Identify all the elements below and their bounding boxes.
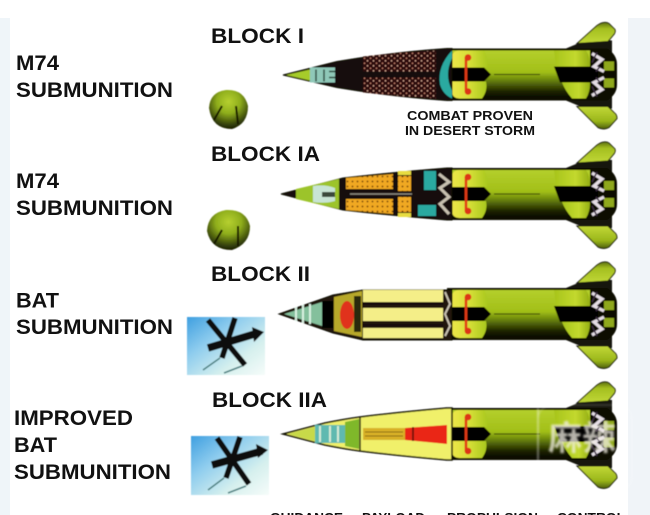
watermark: 麻辣	[548, 420, 616, 458]
rear section	[447, 262, 617, 368]
nose tip	[286, 70, 310, 80]
rear section	[447, 142, 617, 248]
label: improved BAT submunition (Block IIA): IMPROVED	[14, 407, 133, 430]
callout: combat proven: COMBAT PROVEN	[407, 109, 533, 123]
label: M74 submunition (Block IA): SUBMUNITION	[16, 197, 173, 220]
wiring	[439, 174, 449, 214]
heading: Block II: BLOCK II	[211, 263, 310, 286]
yellow bay bottom	[363, 328, 443, 338]
watermark	[538, 405, 632, 491]
teal crescent	[440, 50, 452, 98]
missile: Block IIA	[283, 382, 617, 488]
missile: Block II	[279, 262, 617, 368]
payload dots	[363, 50, 436, 72]
icon: BAT submunition image 1	[187, 317, 265, 375]
heading: Block IA: BLOCK IA	[211, 143, 320, 166]
missile: Block I	[283, 22, 617, 129]
forebody	[283, 48, 452, 100]
label: improved BAT submunition (Block IIA): SUBMUNITION	[14, 461, 171, 484]
rear section	[447, 22, 617, 129]
label: improved BAT submunition (Block IIA)	[14, 407, 171, 484]
label: M74 submunition (Block IA)	[16, 170, 173, 220]
yellow bay middle	[363, 308, 443, 321]
callout: combat proven: IN DESERT STORM	[405, 124, 535, 138]
yellow bay	[398, 176, 411, 191]
forebody	[281, 168, 452, 220]
label: M74 submunition (Block I): SUBMUNITION	[16, 79, 173, 102]
wiring	[445, 292, 450, 336]
guidance	[310, 68, 335, 82]
missile: Block IA	[281, 142, 617, 248]
label: BAT submunition (Block II)	[16, 290, 173, 339]
icon: M74 bomblet 1	[209, 90, 248, 129]
red oval	[340, 301, 354, 329]
payload orange	[346, 174, 393, 189]
heading: Block I: BLOCK I	[211, 25, 304, 48]
guidance	[315, 425, 345, 443]
nose	[296, 179, 339, 209]
label: improved BAT submunition (Block IIA): BAT	[14, 434, 57, 457]
yellow bay top	[363, 290, 443, 302]
forebody	[283, 408, 452, 460]
teal electronics	[418, 171, 436, 216]
bottom section labels	[270, 510, 625, 515]
core	[363, 428, 405, 440]
nose	[288, 427, 315, 441]
label: M74 submunition (Block I)	[16, 52, 173, 102]
label: M74 submunition (Block IA): M74	[16, 170, 59, 193]
label: BAT submunition (Block II): BAT	[16, 290, 59, 312]
label: M74 submunition (Block I): M74	[16, 52, 59, 75]
label: BAT submunition (Block II): SUBMUNITION	[16, 316, 173, 339]
warhead mount	[334, 291, 362, 337]
icon: M74 bomblet 2	[207, 210, 250, 250]
nose	[284, 302, 322, 326]
icon: BAT submunition image 2	[191, 436, 269, 495]
callout: combat proven	[405, 109, 535, 138]
red section	[405, 425, 447, 444]
guidance	[313, 185, 335, 203]
forebody	[279, 290, 452, 340]
rear section	[447, 382, 617, 488]
heading: Block IIA: BLOCK IIA	[212, 389, 327, 412]
